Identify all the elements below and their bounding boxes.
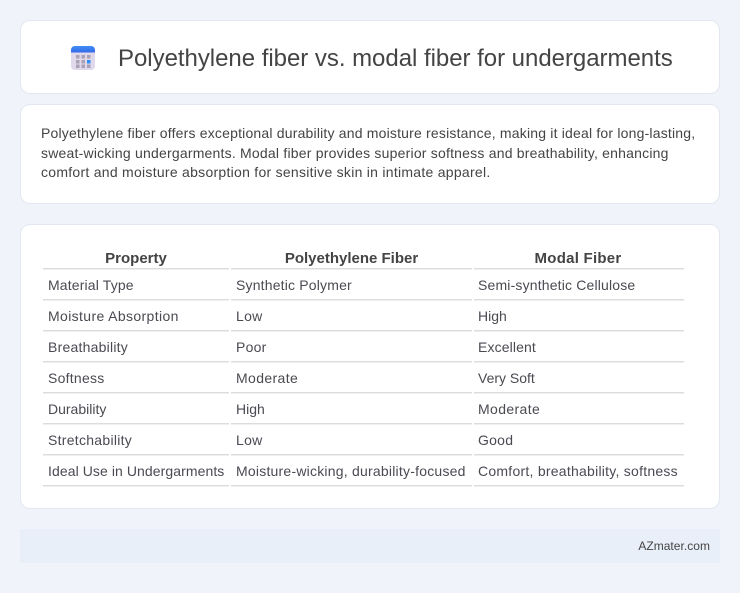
panel: title header [20,20,720,94]
table header: Modal Fiber: Modal Fiber [535,250,621,267]
row: Ideal Use in Undergarments [48,463,678,479]
intro paragraph [41,125,695,180]
row: Breathability: Poor [236,339,267,355]
row: Ideal Use in Undergarments: Comfort, breathability, softness [478,463,678,479]
icon: calendar grid [71,46,95,70]
row: Material Type: Material Type [48,277,134,293]
footer bar [20,529,720,563]
row: Material Type: Semi-synthetic Cellulose [478,277,635,293]
row: Ideal Use in Undergarments: Moisture-wicking, durability-focused [236,463,466,479]
row: Softness: Very Soft [478,370,535,386]
row: Material Type: Synthetic Polymer [236,277,352,293]
footer brand: AZmater.com [638,539,710,553]
table header: Polyethylene Fiber: Polyethylene Fiber [285,250,418,267]
row: Breathability: Excellent [478,339,536,355]
row: Moisture Absorption: High [478,308,507,324]
row: Stretchability: Good [478,432,513,448]
row: Softness: Moderate [236,370,298,386]
row: Breathability: Breathability [48,339,128,355]
row: Durability [48,401,540,417]
row: Softness [48,370,535,386]
row: Breathability [48,339,536,355]
title: Polyethylene fiber vs. modal fiber for undergarments [118,45,673,72]
row: Stretchability: Stretchability [48,432,132,448]
panel: comparison table [20,224,720,509]
row: Stretchability [48,432,513,448]
row: Moisture Absorption [48,308,507,324]
intro paragraph: sweat-wicking undergarments. Modal fiber provides superior softness and breathability, enhancing [41,145,669,161]
row: Softness: Softness [48,370,104,386]
row: Durability: Moderate [478,401,540,417]
row: Material Type [48,277,635,293]
intro paragraph: comfort and moisture absorption for sensitive skin in intimate apparel. [41,164,490,180]
panel: intro text [20,104,720,204]
row: Moisture Absorption: Moisture Absorption [48,308,179,324]
row: Moisture Absorption: Low [236,308,263,324]
row: Ideal Use in Undergarments: Ideal Use in Undergarments [48,463,224,479]
row: Stretchability: Low [236,432,263,448]
intro paragraph: Polyethylene fiber offers exceptional durability and moisture resistance, making it ideal for long-lasting, [41,125,695,141]
table header: Property: Property [105,250,167,267]
row: Durability: High [236,401,265,417]
row: Durability: Durability [48,401,106,417]
